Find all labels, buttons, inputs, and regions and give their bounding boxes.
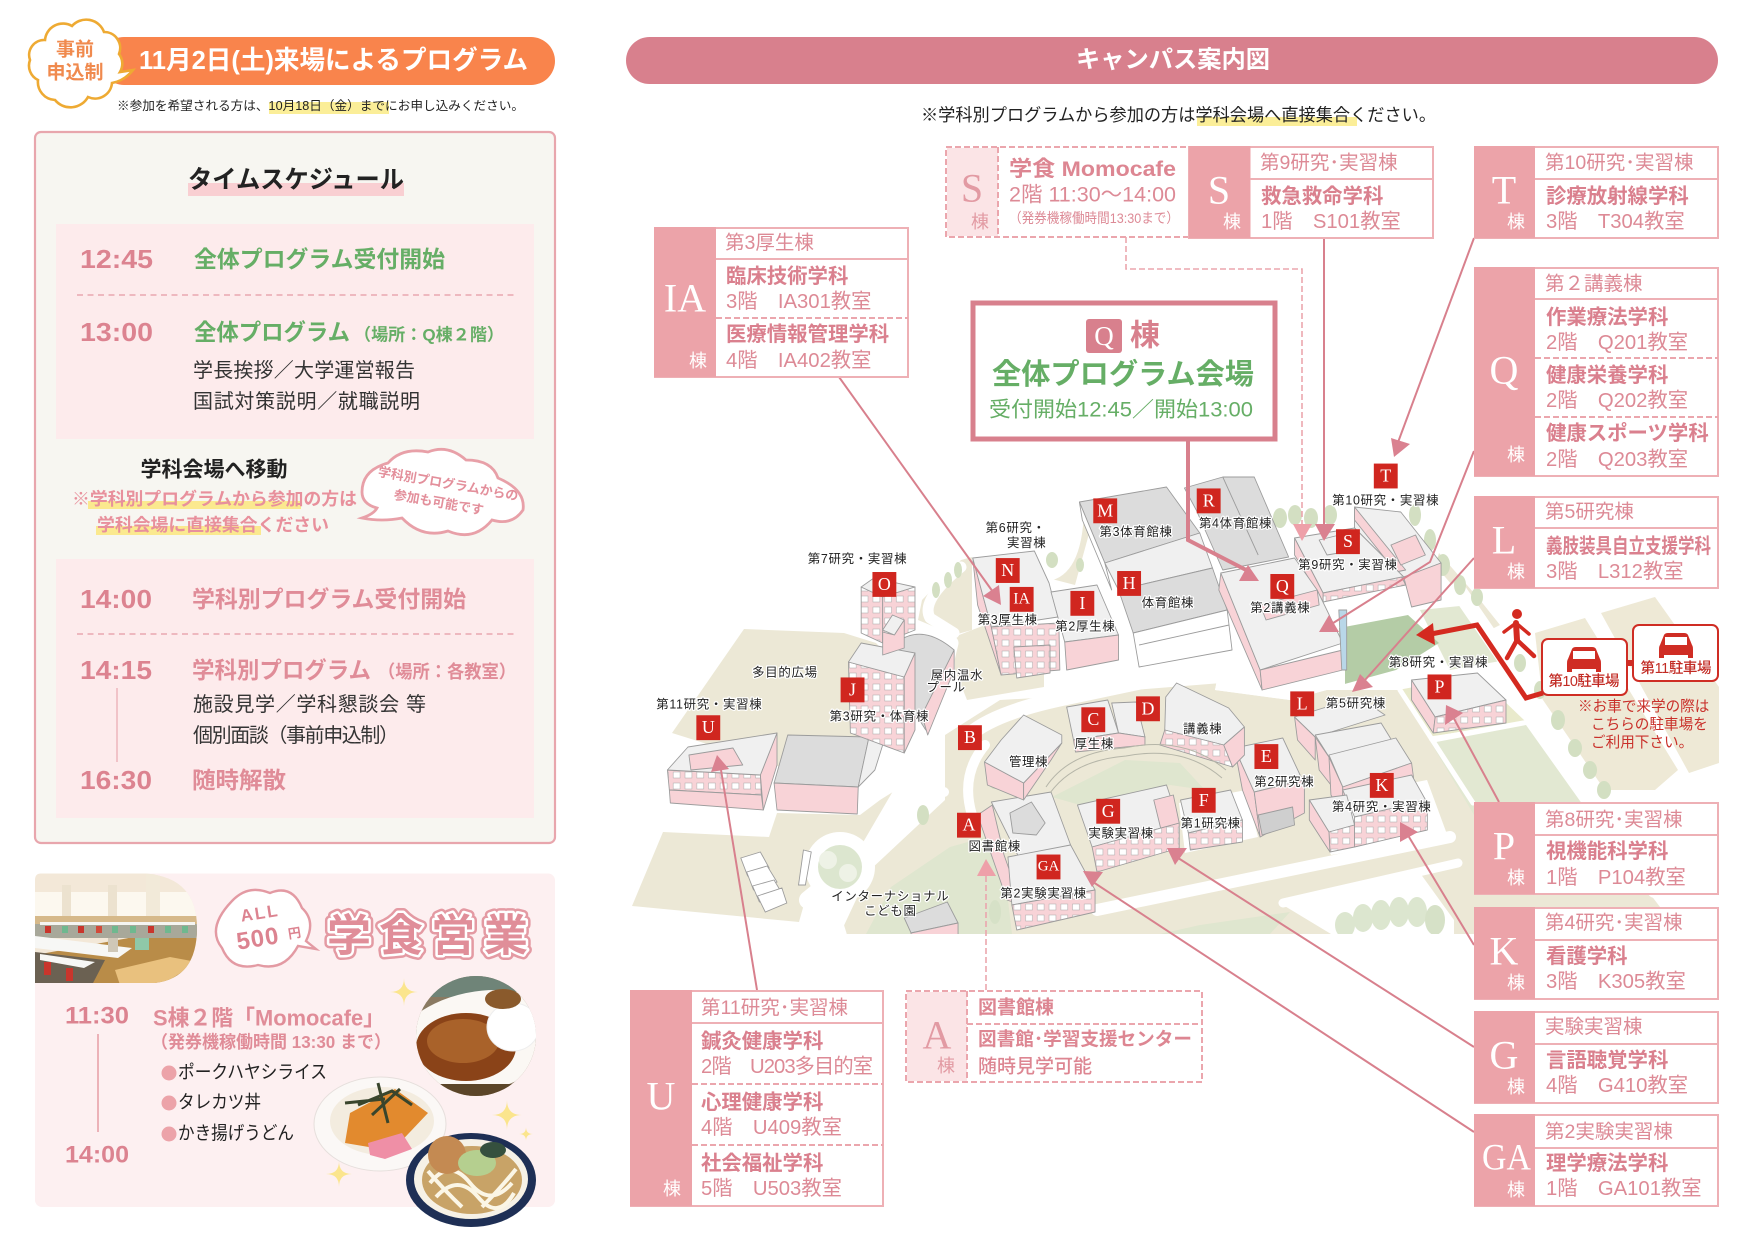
info box: L building: L [1492,518,1516,562]
building C [1067,700,1145,752]
photo: cafeteria interior [35,873,200,985]
text: location and menu: S棟２階「Momocafe」 [153,1006,385,1030]
info box: U building: 5階 U503教室 [701,1177,842,1200]
callout: all 500 yen: 円 [287,925,302,942]
map markers: building letters: P [1434,676,1444,696]
building N and IA [973,551,1060,678]
schedule block: department programme: 随時解散 [192,767,286,793]
map markers: building letters: GA [1038,858,1060,874]
buses [741,850,811,912]
info box: U building: 2階 U203多目的室 [701,1055,873,1078]
info box: Q building: 健康スポーツ学科 [1546,422,1709,445]
map labels: building names: 管理棟 [1009,754,1048,769]
heading: cafeteria open: 営 [431,912,475,960]
map markers: building letters: D [1142,698,1155,718]
building O [861,578,915,655]
callout: Q building main venue: 全体プログラム会場 [992,358,1254,391]
text: opening hours: 14:00 [65,1142,129,1168]
info box: A library [906,991,1202,1082]
schedule block: department programme: 学科別プログラム [192,657,371,683]
info box: S building: 棟 [1223,212,1241,232]
parking: lot 11: 第11駐車場 [1640,659,1712,677]
map markers: building letters: R [1203,490,1215,510]
map trees [818,504,1611,938]
building U [667,733,777,810]
map labels: building names: 第9研究・実習棟 [1298,557,1398,572]
info box: Q building: 棟 [1507,445,1525,465]
heading: campus guide map: キャンパス案内図 [1076,46,1270,74]
info box: IA building: 4階 IA402教室 [726,349,871,372]
info box: U building: 第11研究･実習棟 [701,997,848,1019]
banner title: 11月2日(土)来場によるプログラム [139,45,528,75]
info box: S cafeteria: 学食 Momocafe [1009,157,1176,181]
info box: IA building: 臨床技術学科 [726,264,848,288]
building I [1051,585,1119,670]
info box: K building: 第4研究･実習棟 [1545,912,1683,934]
schedule block: department programme: （場所：各教室） [378,661,516,682]
info box: S building: S [1208,168,1230,212]
text: location and menu: ポークハヤシライス [178,1062,327,1082]
callout: Q building main venue: Q [1094,321,1114,351]
info box: GA building: GA [1482,1138,1531,1178]
building T [1355,507,1441,607]
map markers: building letters [696,464,1451,879]
building R gym [1184,477,1289,570]
building A library [978,792,1071,905]
map labels: building names: 実験実習棟 [1088,826,1154,841]
text: location and menu: タレカツ丼 [178,1092,261,1112]
info box: IA building: 医療情報管理学科 [726,323,889,346]
callout: all 500 yen: 500 [235,922,281,956]
building D lecture [1160,683,1244,767]
map labels: building names: 第2研究棟 [1254,774,1314,789]
schedule block: overall programme: 学長挨拶／大学運営報告 [193,359,415,382]
info box: IA building: 棟 [689,351,707,371]
info box: U building: U [647,1074,676,1118]
info box: K building: 看護学科 [1546,945,1628,968]
info box: U building: 4階 U409教室 [701,1116,842,1139]
heading: campus guide map [626,37,1718,84]
map labels: building names: 第7研究・実習棟 [808,551,907,566]
info box: P building [1474,802,1718,894]
arrow: walking route from parking [1416,623,1543,698]
parking: lot 10 [1542,639,1627,695]
note: go directly to department venue: ※学科別プログラムから参加の方は学科会場へ直接集合ください。 [921,105,1436,125]
info box: A library: 図書館･学習支援センター [978,1028,1192,1050]
heading: time schedule: タイムスケジュール [188,166,404,194]
info box: S cafeteria: 棟 [971,212,989,232]
info box: P building: 棟 [1507,868,1525,888]
info box: K building [1474,907,1718,999]
heading: cafeteria open: 営 [431,912,475,960]
callout: Q building main venue [973,303,1275,439]
map markers: building letters: S [1343,531,1353,551]
info box: K building: 3階 K305教室 [1546,970,1686,993]
map markers: building letters: J [849,679,856,699]
info box: IA building: 3階 IA301教室 [726,290,871,313]
info box: S building: 1階 S101教室 [1261,210,1401,233]
map markers: building letters: N [1001,560,1014,580]
map labels: building names: 実習棟 [1007,535,1046,550]
map labels: building names: こども園 [864,904,917,918]
info box: GA building: 棟 [1507,1180,1525,1200]
info box: A library: 図書館棟 [978,996,1054,1018]
map markers: building letters: H [1123,573,1136,593]
building management [984,715,1062,800]
map labels: building names: 第4研究・実習棟 [1332,799,1431,814]
schedule block: overall programme: 国試対策説明／就職説明 [193,390,420,413]
text: move to department venue: ※学科別プログラムから参加の方は [72,489,357,509]
note: use parking lots: こちらの駐車場を [1591,716,1708,733]
schedule block: overall programme: 全体プログラム受付開始 [194,246,445,272]
map markers: building letters: M [1097,500,1113,520]
info box: IA building: 第3厚生棟 [725,232,814,254]
info box: L building: 棟 [1507,562,1525,582]
map labels: building names: 第8研究・実習棟 [1389,655,1488,670]
info box: T building [1474,146,1718,238]
schedule block: overall programme: （場所：Q棟２階） [354,326,504,344]
map markers: building letters: IA [1013,590,1031,607]
schedule block: overall programme: 全体プログラム [194,319,350,345]
info box: L building: 3階 L312教室 [1546,560,1684,583]
icon: sparkles [326,978,533,1187]
info box: Q building: 健康栄養学科 [1546,363,1668,387]
info box: Q building [1474,267,1718,476]
info box: G building: 4階 G410教室 [1546,1074,1688,1097]
building G [1077,785,1179,872]
schedule block: department programme: 施設見学／学科懇談会 等 [193,693,426,716]
building F [1180,790,1242,850]
info box: P building: 第8研究･実習棟 [1545,809,1683,831]
info box: IA building [654,227,908,377]
schedule block: overall programme: 13:00 [80,317,153,347]
info box: Q building: 2階 Q202教室 [1546,389,1688,412]
text: move to department venue: 学科会場に直接集合ください [97,515,329,535]
callout: department programme joining allowed: 学科別プログラムからの [377,464,519,503]
info box: G building: 実験実習棟 [1545,1016,1643,1038]
header: pre-registration programme banner [29,20,555,107]
heading: cafeteria open: 業 [484,912,528,960]
map labels: building names: 第4体育館棟 [1199,515,1272,530]
map labels: building names: 体育館棟 [1142,595,1194,610]
building J and pool [848,634,954,753]
building gym west [774,735,883,814]
note: use parking lots [1578,698,1709,751]
map markers: building letters: O [878,574,891,594]
heading: cafeteria open [327,912,528,960]
building M gym [1079,487,1212,590]
callout: Q building main venue: 受付開始12:45／開始13:00 [989,398,1253,422]
text: location and menu: かき揚げうどん [178,1122,294,1144]
map labels: building names: 第2厚生棟 [1055,619,1115,634]
heading: cafeteria open: 食 [379,912,423,960]
info box: Q building: 第２講義棟 [1545,273,1643,295]
info box: T building: 診療放射線学科 [1546,185,1689,208]
heading: cafeteria open: 業 [484,912,528,960]
info box: T building: 棟 [1507,212,1525,232]
panel: cafeteria open [35,873,570,1227]
heading: cafeteria open: 学 [327,912,371,960]
heading: cafeteria open: 食 [379,912,423,960]
note: application deadline: ※参加を希望される方は、10月18日（金）までにお申し込みください。 [117,98,524,113]
info box: T building: T [1492,168,1516,212]
walkway arcs [1046,744,1226,793]
map labels: building names: 第2実験実習棟 [1000,885,1087,900]
callout: department programme joining allowed [362,449,523,535]
info box: IA building: IA [664,276,706,320]
photo: kakiage udon [406,1133,536,1227]
icon: walking person [1504,609,1534,658]
info box: S cafeteria: S [961,166,983,210]
map labels: building names: 第6研究・ [986,520,1046,535]
info box: P building: 視機能科学科 [1546,840,1668,863]
map labels: building names: 図書館棟 [969,839,1021,854]
info box: G building: G [1490,1032,1518,1078]
campus map [632,477,1719,945]
text: opening hours [65,1002,129,1168]
info box: G building: 言語聴覚学科 [1546,1049,1668,1072]
info box: U building: 心理健康学科 [701,1091,823,1114]
info box: U building [630,990,883,1206]
schedule block: overall programme: 12:45 [80,244,153,274]
map markers: building letters: E [1261,746,1272,766]
map labels: building names [656,492,1488,918]
map markers: building letters: I [1079,593,1085,613]
schedule block: department programme: 14:00 [80,584,152,614]
info box: S building: 救急救命学科 [1261,185,1383,208]
info box: GA building: 第2実験実習棟 [1545,1121,1673,1143]
map labels: building names: 第10研究・実習棟 [1332,492,1439,507]
map markers: building letters: B [964,727,976,747]
map labels: building names: 多目的広場 [752,664,818,679]
building L and K [1295,697,1427,852]
info box: P building: 1階 P104教室 [1546,866,1686,889]
info box: L building: 義肢装具自立支援学科 [1546,535,1711,558]
schedule block: department programme: 16:30 [80,765,152,795]
callout: all 500 yen: ALL [239,901,281,926]
map roads [805,520,1655,937]
map labels: building names: 講義棟 [1183,721,1222,736]
map labels: building names: プール [926,680,966,694]
text: move to department venue: 学科会場へ移動 [140,458,288,482]
info box: A library: 随時見学可能 [978,1056,1092,1078]
building Q [1219,558,1347,690]
info box: Q building: 作業療法学科 [1546,306,1668,329]
info box: L building [1474,496,1718,588]
info box: K building: 棟 [1507,973,1525,993]
map labels: building names: 屋内温水 [931,668,983,682]
map labels: building names: 第5研究棟 [1326,695,1386,710]
building GA [1008,845,1095,930]
info box: S cafeteria: （発券機稼働時間13:30まで） [1009,210,1179,226]
icon: pre-registration cloud badge [29,20,133,107]
heading: cafeteria open: 食 [379,912,423,960]
photo: sauce katsu bowl [314,1077,446,1171]
info box: U building: 鍼灸健康学科 [701,1030,823,1053]
arrows: info boxes to buildings [711,237,1499,1132]
panel: time schedule [35,132,555,843]
info box: Q building: 2階 Q203教室 [1546,448,1688,471]
map labels: building names: 厚生棟 [1075,736,1114,751]
text: move to department venue [72,458,357,535]
info box: S cafeteria [946,147,1189,237]
icon: pre-registration cloud badge: 申込制 [46,62,104,84]
map markers: building letters: L [1297,693,1308,713]
info box: A library: 棟 [937,1056,955,1076]
info box: S cafeteria: 2階 11:30〜14:00 [1009,184,1176,206]
text: location and menu [151,1006,391,1144]
map ground [632,520,1719,934]
info box: L building: 第5研究棟 [1545,501,1634,523]
map markers: building letters: G [1102,801,1115,821]
map labels: building names: 第11研究・実習棟 [656,696,762,711]
info box: Q building: 2階 Q201教室 [1546,331,1688,354]
info box: GA building: 1階 GA101教室 [1546,1177,1702,1200]
map markers: building letters: T [1380,466,1391,486]
photo: pork hayashi rice [416,976,536,1096]
schedule block: department programme: 個別面談（事前申込制） [193,724,399,747]
heading: cafeteria open: 学 [327,912,371,960]
callout: department programme joining allowed: 参加も可能です [393,487,485,518]
map labels: building names: 第3体育館棟 [1099,524,1173,539]
info box: S building: 第9研究･実習棟 [1260,152,1398,174]
info box: G building: 棟 [1507,1077,1525,1097]
map labels: building names: 第3厚生棟 [978,612,1038,627]
callout: all 500 yen [216,890,316,967]
note: use parking lots: ※お車で来学の際は [1578,698,1709,715]
map labels: building names: 第1研究棟 [1181,816,1241,831]
note: use parking lots: ご利用下さい。 [1591,734,1693,751]
schedule block: department programme: 14:15 [80,655,152,685]
schedule block: overall programme [56,224,534,439]
schedule block: department programme: 学科別プログラム受付開始 [192,586,466,612]
parking: lot 11 [1626,625,1718,681]
map markers: building letters: U [702,717,715,737]
map markers: building letters: K [1375,775,1388,795]
info box: G building [1474,1011,1718,1103]
text: opening hours: 11:30 [65,1002,129,1030]
info box: U building: 社会福祉学科 [701,1152,823,1175]
map markers: building letters: A [962,815,975,835]
info box: GA building [1474,1114,1718,1206]
info box: S building [1189,146,1433,238]
heading: cafeteria open: 営 [431,912,475,960]
callout: Q building main venue: 棟 [1130,320,1160,352]
info box: A library: A [923,1012,952,1058]
building kindergarten [904,902,958,934]
map markers: building letters: C [1087,709,1099,729]
map labels: building names: 第2講義棟 [1250,600,1310,615]
schedule block: department programme [56,559,534,818]
map markers: building letters: F [1199,790,1209,810]
map markers: building letters: Q [1276,576,1289,596]
heading: cafeteria open: 学 [327,912,371,960]
parking: lot 10: 第10駐車場 [1548,672,1620,690]
info box: U building: 棟 [663,1179,681,1199]
info box: P building: P [1493,824,1515,868]
info box: Q building: Q [1490,348,1519,392]
map labels: building names: インターナショナル [831,889,949,903]
building S [1295,528,1406,602]
building P [1412,673,1506,733]
info box: T building: 第10研究･実習棟 [1545,152,1694,174]
icon: pre-registration cloud badge: 事前 [56,38,94,60]
building H gym [1119,568,1232,667]
map labels: building names: 第3研究・体育棟 [830,708,929,723]
text: location and menu: （発券機稼働時間 13:30 まで） [151,1032,391,1052]
info box: GA building: 理学療法学科 [1546,1152,1668,1175]
info box: T building: 3階 T304教室 [1546,210,1685,233]
info box: K building: K [1490,928,1519,974]
building E [1235,738,1304,837]
heading: cafeteria open: 業 [484,912,528,960]
